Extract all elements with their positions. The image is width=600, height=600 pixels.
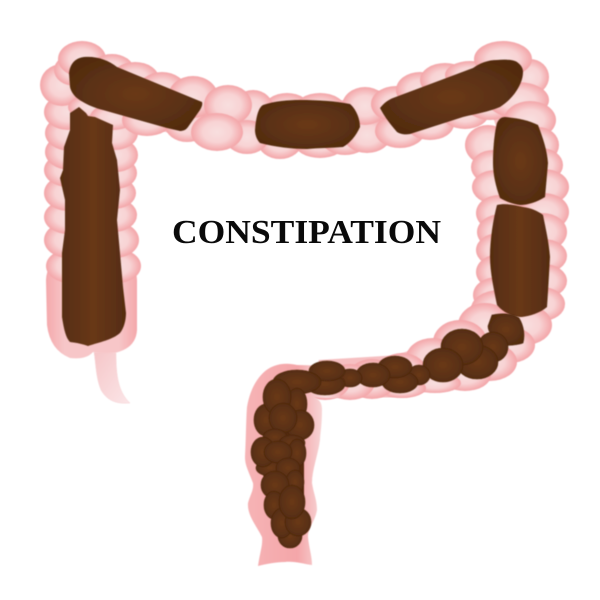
title: CONSTIPATION [172, 214, 441, 251]
tail: appendix [94, 352, 130, 403]
stool: ascending colon [60, 107, 126, 346]
top-left colon bend wall [40, 41, 218, 142]
transverse colon wall [191, 85, 391, 159]
rectum wall [245, 364, 340, 566]
stool: top-right [380, 60, 523, 134]
top-right colon bend wall [371, 41, 556, 148]
stool: descending lower [490, 204, 550, 317]
colon backing band [90, 80, 520, 382]
ascending colon wall [44, 94, 141, 358]
descending colon wall [465, 125, 569, 328]
stool: sigmoid lumps [338, 314, 524, 393]
stool: descending upper [493, 117, 548, 205]
stool: rectum lumps [251, 361, 345, 548]
stool: top-left [69, 57, 202, 131]
sigmoid colon wall [300, 303, 552, 400]
stool: transverse middle [255, 100, 360, 149]
